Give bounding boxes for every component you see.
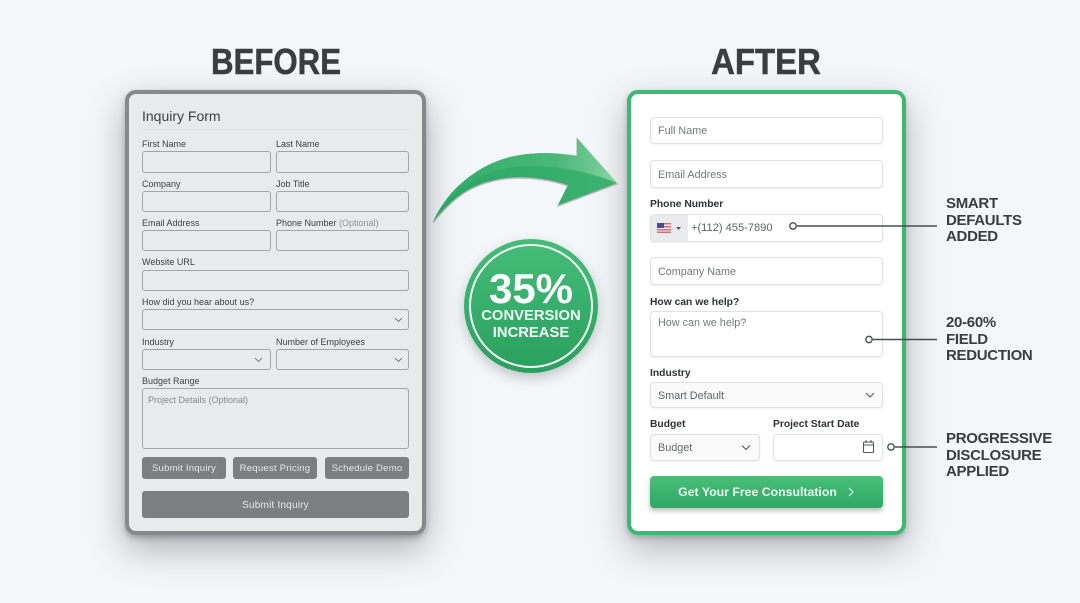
callout: smart defaults: ADDED <box>946 228 998 245</box>
callout: smart defaults: DEFAULTS <box>946 212 1022 228</box>
label: Email Address <box>142 218 200 228</box>
input: date <box>773 434 883 461</box>
select <box>142 309 409 330</box>
label: First Name <box>142 139 186 149</box>
heading: after: AFTER <box>711 41 821 82</box>
label: Company <box>142 179 181 189</box>
callout: field reduction: 20-60% <box>946 314 996 331</box>
submit button <box>142 491 409 518</box>
label: industry: Industry <box>650 368 691 379</box>
button <box>325 456 409 478</box>
submit button: Submit Inquiry <box>242 500 309 511</box>
input: email: Email Address <box>658 169 727 181</box>
panel: before form <box>125 90 426 535</box>
CTA button: Get Your Free Consultation <box>678 485 837 499</box>
label: Phone Number (Optional) <box>276 218 379 228</box>
callout: field reduction <box>946 314 1032 364</box>
heading: before: BEFORE <box>211 41 341 82</box>
input <box>276 151 409 173</box>
callout connector lines <box>789 222 937 451</box>
textarea: How can we help? <box>658 317 746 329</box>
icon: calendar <box>862 440 874 453</box>
label: budget: Budget <box>650 419 685 430</box>
badge label <box>481 308 581 341</box>
input: phone <box>650 214 883 242</box>
input <box>142 230 271 251</box>
input <box>142 191 271 212</box>
label: Number of Employees <box>276 337 365 347</box>
callout: progressive disclosure: DISCLOSURE <box>946 446 1041 464</box>
CTA button <box>650 476 883 508</box>
button: Submit Inquiry <box>152 462 216 474</box>
button <box>142 456 226 478</box>
callout: smart defaults: SMART <box>946 195 998 212</box>
label: Job Title <box>276 179 310 189</box>
button <box>233 456 317 478</box>
connector: smart defaults <box>790 223 937 229</box>
title divider <box>142 129 409 130</box>
form title: Inquiry Form <box>142 108 221 124</box>
icon: US flag <box>657 223 681 233</box>
textarea <box>650 311 883 357</box>
select: industry: Smart Default <box>658 390 724 402</box>
callout: progressive disclosure: PROGRESSIVE <box>946 430 1052 447</box>
label: phone: Phone Number <box>650 199 723 210</box>
callout: progressive disclosure: APPLIED <box>946 463 1009 480</box>
badge value: 35% <box>489 265 573 312</box>
label: Last Name <box>276 139 320 149</box>
input: phone: +(112) 455-7890 <box>691 222 773 234</box>
label: date: Project Start Date <box>773 419 859 430</box>
badge ring <box>469 244 593 368</box>
input <box>142 270 409 291</box>
button: Schedule Demo <box>332 462 402 474</box>
label: Industry <box>142 337 174 347</box>
label: help: How can we help? <box>650 297 739 308</box>
connector: progressive disclosure <box>888 444 937 450</box>
callout: field reduction: REDUCTION <box>946 347 1032 364</box>
input: company: Company Name <box>658 266 736 278</box>
select <box>276 349 409 370</box>
input: email <box>650 160 883 188</box>
badge label: CONVERSION <box>481 308 581 324</box>
input <box>276 230 409 251</box>
select: budget: Budget <box>658 442 692 454</box>
badge: 35% conversion increase <box>464 239 598 373</box>
flag selector <box>651 215 688 241</box>
label: Budget Range <box>142 376 200 386</box>
callout: smart defaults <box>946 195 1022 245</box>
textarea <box>142 388 409 449</box>
connector: field reduction <box>866 336 937 343</box>
input: company <box>650 257 883 285</box>
input <box>142 151 271 173</box>
input: full name: Full Name <box>658 125 707 137</box>
button: Request Pricing <box>240 462 310 474</box>
label: Website URL <box>142 257 195 267</box>
label: How did you hear about us? <box>142 297 254 307</box>
icon: chevron <box>848 488 854 496</box>
input <box>276 191 409 212</box>
select <box>142 349 271 370</box>
input: full name <box>650 117 883 144</box>
textarea: Project Details (Optional) <box>148 395 248 405</box>
badge label: INCREASE <box>493 325 569 341</box>
select: industry <box>650 382 883 408</box>
arrow <box>432 138 618 224</box>
panel: after form <box>627 90 906 535</box>
select: budget <box>650 434 760 461</box>
callout: field reduction: FIELD <box>946 330 988 348</box>
callout: progressive disclosure <box>946 430 1052 480</box>
